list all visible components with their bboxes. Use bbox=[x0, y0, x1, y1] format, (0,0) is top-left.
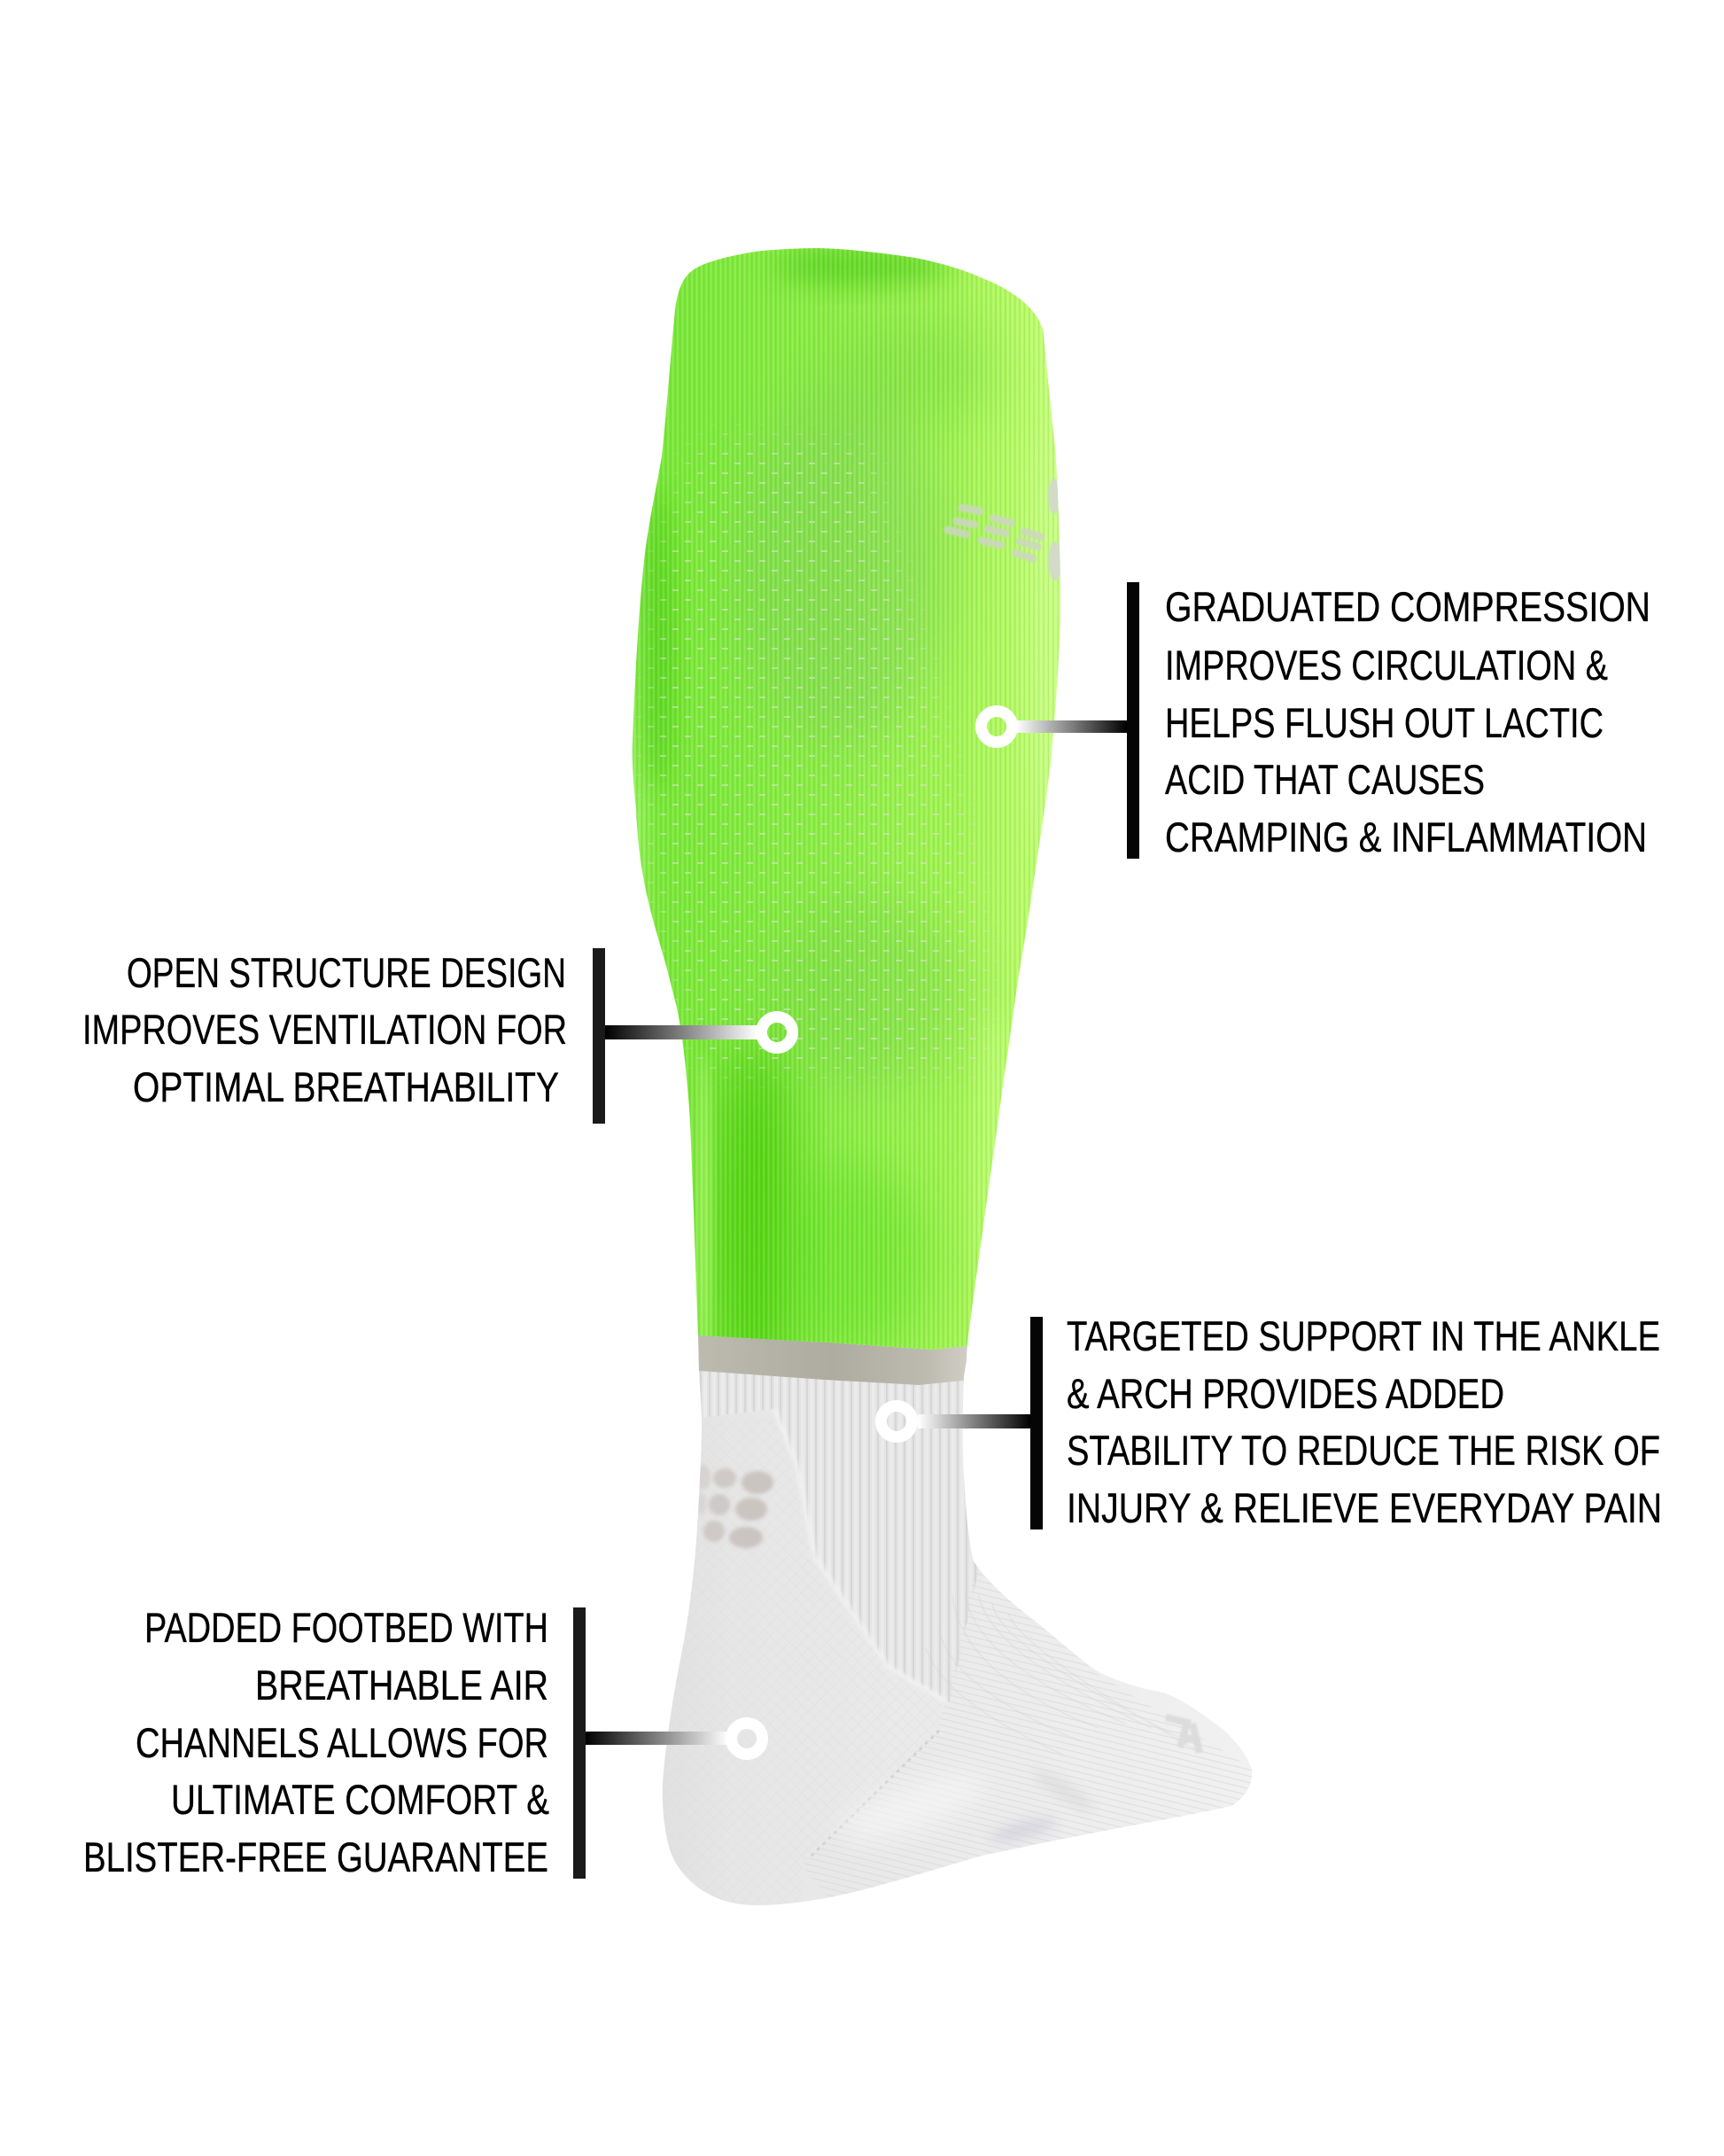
text block: HELPS FLUSH OUT LACTIC bbox=[1165, 700, 1604, 747]
marker ring bbox=[762, 1017, 792, 1047]
text block: PADDED FOOTBED WITH bbox=[144, 1605, 548, 1652]
text block: IMPROVES VENTILATION FOR bbox=[82, 1007, 567, 1054]
connector line bbox=[918, 1414, 1031, 1428]
marker ring bbox=[881, 1405, 912, 1437]
white foot and ankle bbox=[656, 1356, 1276, 1914]
connector line bbox=[605, 1025, 757, 1039]
connector line bbox=[1016, 720, 1128, 733]
vertical bar bbox=[593, 948, 605, 1124]
vertical bar bbox=[1030, 1317, 1043, 1529]
text block: ULTIMATE COMFORT & bbox=[171, 1777, 549, 1824]
text block bbox=[1165, 584, 1650, 861]
callout: padded footbed bbox=[83, 1605, 762, 1881]
text block: ACID THAT CAUSES bbox=[1165, 757, 1485, 804]
text block: CHANNELS ALLOWS FOR bbox=[136, 1720, 548, 1767]
vertical bar bbox=[573, 1607, 586, 1879]
vertical bar bbox=[1127, 582, 1139, 859]
text block: BLISTER-FREE GUARANTEE bbox=[83, 1834, 548, 1881]
grey reflective band bbox=[698, 1335, 967, 1385]
green leg section bbox=[633, 248, 1060, 1350]
reflective mark on toe bbox=[1166, 1717, 1200, 1753]
connector line bbox=[586, 1732, 728, 1745]
text block bbox=[1067, 1313, 1662, 1532]
text block: OPEN STRUCTURE DESIGN bbox=[127, 950, 566, 997]
text block bbox=[83, 1605, 549, 1881]
marker ring bbox=[732, 1723, 762, 1755]
text block: IMPROVES CIRCULATION & bbox=[1165, 642, 1608, 689]
callout: targeted support bbox=[881, 1313, 1662, 1532]
text block: BREATHABLE AIR bbox=[255, 1662, 548, 1709]
ventilation dash pattern bbox=[635, 424, 1001, 1088]
callout: graduated compression bbox=[982, 582, 1650, 861]
compression sock bbox=[611, 239, 1276, 1914]
text block bbox=[82, 950, 567, 1111]
reflective logo on calf bbox=[948, 508, 1041, 558]
marker ring bbox=[982, 711, 1012, 743]
reflective dots on ankle bbox=[695, 1465, 773, 1548]
text block: & ARCH PROVIDES ADDED bbox=[1067, 1371, 1504, 1418]
callout: open structure design bbox=[82, 948, 792, 1124]
text block: OPTIMAL BREATHABILITY bbox=[133, 1064, 559, 1111]
